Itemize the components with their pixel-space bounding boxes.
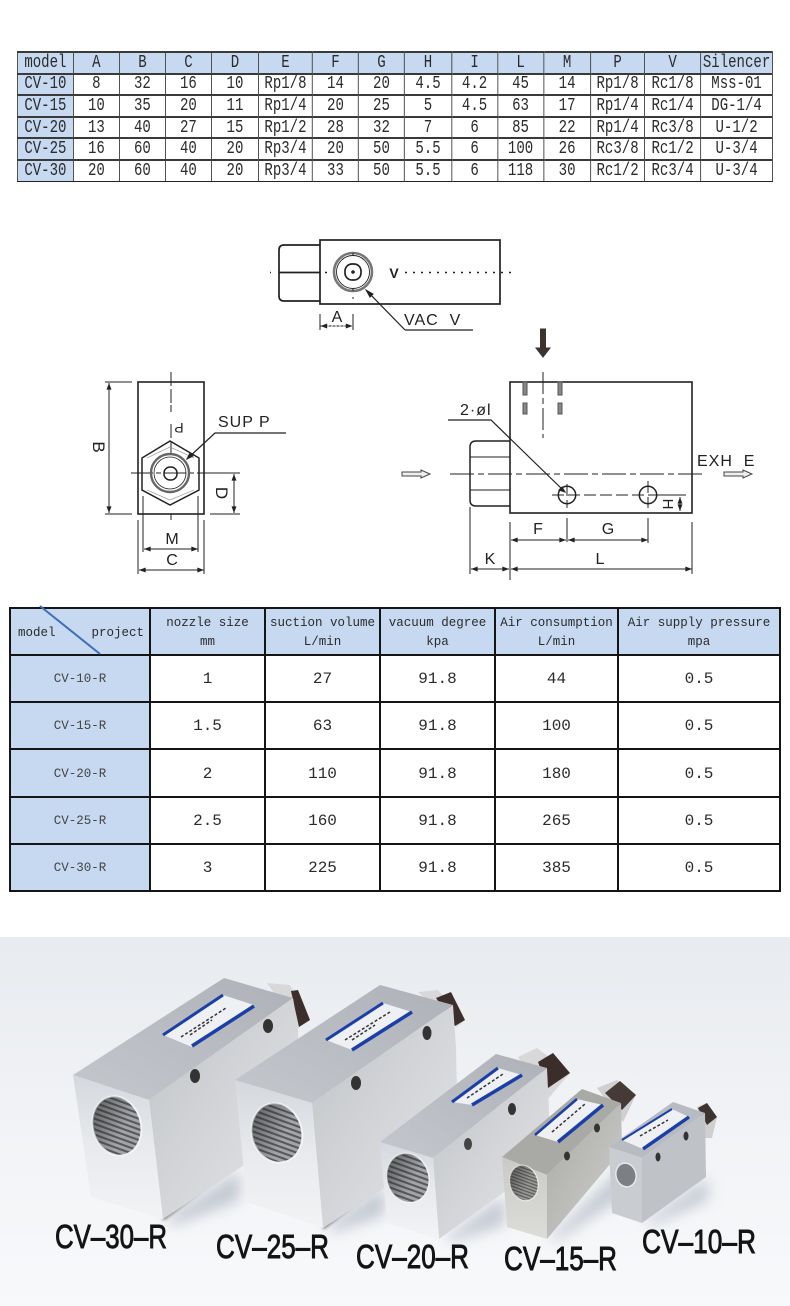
row: CV-20-R: 110 (308, 765, 337, 783)
dimension C (138, 520, 204, 574)
performance table header row: vacuum degree (389, 616, 486, 630)
row: CV-30-R: CV-30-R (54, 861, 106, 875)
row: CV-15: Rp1/4 (597, 96, 639, 116)
rotated P mark: P (174, 420, 184, 436)
row: CV-10: 8 (92, 74, 101, 94)
dimension table header row: A (92, 53, 101, 73)
row: CV-25: 20 (327, 139, 344, 159)
dimension K (470, 507, 509, 574)
performance table header row: L/min (538, 635, 575, 649)
performance table header row: mpa (688, 635, 710, 649)
table: dimensions by model (17, 51, 773, 182)
product: CV-15-R (502, 1080, 636, 1239)
row: CV-25: 26 (559, 139, 576, 159)
row: CV-15: CV-15 (24, 96, 66, 116)
floor shadows (165, 1165, 708, 1242)
row: CV-30-R: 225 (308, 859, 337, 877)
row: CV-25: Rc1/2 (651, 139, 694, 159)
row: CV-10: Rp1/8 (597, 74, 639, 94)
row: CV-25: 5.5 (415, 139, 441, 159)
row: CV-15: 5 (424, 96, 432, 116)
row: CV-10-R: 27 (313, 670, 332, 688)
row: CV-20: 6 (470, 118, 479, 138)
dimension H: H (659, 499, 676, 509)
row: CV-15: 4.5 (462, 96, 487, 116)
performance table header row (11, 609, 779, 654)
dimension table header row: V (668, 53, 677, 73)
row: CV-15: 17 (559, 96, 576, 116)
technical drawings (89, 239, 755, 580)
row: CV-10 (18, 74, 762, 94)
row: CV-20 (18, 118, 758, 138)
product photo illustration (0, 937, 790, 1278)
row: CV-30: 6 (470, 161, 479, 181)
performance table header row: project (91, 626, 144, 640)
dimension table header row: H (424, 53, 432, 73)
table: performance by model (9, 607, 781, 892)
row: CV-25: 50 (373, 139, 390, 159)
row: CV-20-R: CV-20-R (54, 767, 106, 781)
row: CV-30: 30 (559, 161, 576, 181)
dimension G: G (602, 521, 614, 538)
dimension D: D (212, 487, 231, 499)
performance table header row: model (18, 626, 56, 640)
row: CV-20: 32 (373, 118, 390, 138)
row: CV-20: 7 (424, 118, 432, 138)
arrow: inlet right (402, 470, 430, 478)
row: CV-30-R: 385 (542, 859, 571, 877)
row: CV-30-R: 3 (203, 859, 212, 877)
dimension L: L (596, 551, 605, 568)
row: CV-20-R: 180 (542, 765, 571, 783)
arrow: supply down (536, 329, 550, 357)
row: CV-10: 10 (227, 74, 243, 94)
label: EXH E: EXH E (697, 453, 755, 470)
row: CV-25: U-3/4 (715, 139, 758, 159)
row: CV-15: 63 (512, 96, 529, 116)
row: CV-25-R: 91.8 (418, 812, 457, 830)
row: CV-20-R: 0.5 (685, 765, 713, 783)
row: CV-20: 28 (327, 118, 344, 138)
product: CV-25-R (235, 985, 465, 1228)
product: CV-20-R (380, 1048, 570, 1239)
row: CV-10: Rp1/8 (264, 74, 307, 94)
row: CV-30-R: 91.8 (418, 859, 457, 877)
dimension A (320, 309, 353, 330)
row: CV-20: 22 (559, 118, 576, 138)
row: CV-15: 20 (327, 96, 344, 116)
row: CV-10-R: CV-10-R (54, 672, 106, 686)
row: CV-20: 13 (88, 118, 105, 138)
row: CV-10-R: 1 (203, 670, 212, 688)
row: CV-10: Rc1/8 (651, 74, 694, 94)
callout: VAC V: VAC V (404, 312, 461, 329)
dimension H (658, 495, 686, 511)
dimension table header row: I (470, 53, 479, 73)
row: CV-20-R (11, 750, 713, 796)
row: CV-30: 60 (134, 161, 151, 181)
row: CV-20: CV-20 (24, 118, 66, 138)
label: CV-15-R: CV–15–R (504, 1240, 617, 1277)
row: CV-20: U-1/2 (715, 118, 758, 138)
row: CV-25: 40 (180, 139, 197, 159)
performance table header row: mm (200, 635, 215, 649)
drawing: top view with VAC V port (270, 240, 512, 330)
row: CV-25: 100 (508, 139, 533, 159)
row: CV-15-R: 100 (542, 717, 571, 735)
row: CV-15: DG-1/4 (711, 96, 762, 116)
row: CV-20: Rp1/4 (597, 118, 639, 138)
row: CV-25-R (11, 798, 713, 843)
label: CV-30-R: CV–30–R (55, 1218, 167, 1255)
row: CV-25: 20 (227, 139, 243, 159)
dimension table header row: B (138, 53, 147, 73)
callout: SUP P: SUP P (218, 414, 271, 431)
row: CV-25: 16 (88, 139, 105, 159)
row: CV-20: Rp1/2 (264, 118, 307, 138)
dimension B: B (89, 441, 108, 453)
header diagonal line (39, 605, 101, 655)
row: CV-10: 4.2 (462, 74, 487, 94)
row: CV-15: Rp1/4 (264, 96, 307, 116)
performance table header row: suction volume (270, 616, 375, 630)
row: CV-10-R: 44 (547, 670, 566, 688)
dimension K: K (485, 551, 496, 568)
row: CV-15: 10 (88, 96, 105, 116)
row: CV-20: 15 (227, 118, 243, 138)
row: CV-15-R: 63 (313, 717, 332, 735)
row: CV-30: Rc3/4 (651, 161, 694, 181)
row: CV-10: 16 (180, 74, 197, 94)
row: CV-30-R (11, 845, 713, 890)
dimension table header row: L (516, 53, 525, 73)
row: CV-30: Rc1/2 (597, 161, 639, 181)
row: CV-30: 33 (327, 161, 344, 181)
callout: 2-hole diameter (448, 402, 565, 492)
row: CV-20: 85 (512, 118, 529, 138)
performance table header row: Air supply pressure (628, 616, 770, 630)
dimension table header row: G (377, 53, 386, 73)
callout: SUP P (187, 414, 286, 459)
row: CV-10: 45 (512, 74, 529, 94)
dimension table header row: model (24, 53, 66, 73)
row: CV-15-R: CV-15-R (54, 719, 106, 733)
row: CV-30: Rp3/4 (264, 161, 307, 181)
callout: VAC V (366, 290, 473, 330)
row: CV-30: 50 (373, 161, 390, 181)
row: CV-10: CV-10 (24, 74, 66, 94)
dimension D (210, 473, 240, 514)
row: CV-15: Rc1/4 (651, 96, 694, 116)
row: CV-10: Mss-01 (711, 74, 762, 94)
dimension table header row: F (331, 53, 340, 73)
arrow: exhaust right (724, 470, 752, 478)
row: CV-10-R (11, 656, 713, 701)
row: CV-30: U-3/4 (715, 161, 758, 181)
callout: 2-hole diameter: 2·øl (460, 402, 492, 419)
row: CV-15-R: 0.5 (685, 717, 713, 735)
row: CV-30: 40 (180, 161, 197, 181)
row: CV-15: 20 (180, 96, 197, 116)
dimension M: M (165, 531, 179, 548)
row: CV-25-R: 160 (308, 812, 337, 830)
product: CV-30-R (73, 978, 310, 1219)
row: CV-10: 32 (134, 74, 151, 94)
dimension F (510, 518, 567, 580)
row: CV-15 (18, 96, 762, 116)
row: CV-30: 20 (88, 161, 105, 181)
row: CV-20-R: 2 (203, 765, 212, 783)
row: CV-10: 14 (327, 74, 344, 94)
row: CV-10: 20 (373, 74, 390, 94)
row: CV-20: Rc3/8 (651, 118, 694, 138)
dimension table header row: C (184, 53, 193, 73)
dimension B (89, 382, 132, 514)
product labels (55, 1218, 756, 1277)
row: CV-25-R: CV-25-R (54, 814, 106, 828)
label: CV-10-R: CV–10–R (642, 1223, 756, 1260)
row: CV-10: 14 (559, 74, 576, 94)
row: CV-10-R: 91.8 (418, 670, 457, 688)
row: CV-10: 4.5 (415, 74, 441, 94)
drawing: end view with SUP P port (89, 372, 286, 574)
label: CV-25-R: CV–25–R (216, 1228, 329, 1265)
row: CV-15-R: 1.5 (193, 717, 222, 735)
row: CV-15-R (11, 703, 713, 748)
dimension A: A (332, 309, 343, 326)
performance table header row: nozzle size (166, 616, 249, 630)
row: CV-30: 5.5 (415, 161, 441, 181)
row: CV-25-R: 265 (542, 812, 571, 830)
dimension table header row: Silencer (703, 53, 770, 73)
row: CV-25: 6 (470, 139, 479, 159)
dimension F: F (533, 521, 543, 538)
V mark: V (389, 265, 399, 281)
performance table header row: Air consumption (500, 616, 613, 630)
row: CV-15: 11 (227, 96, 243, 116)
row: CV-30: CV-30 (24, 161, 66, 181)
row: CV-10-R: 0.5 (685, 670, 713, 688)
performance table header row: kpa (426, 635, 449, 649)
dimension table header row: D (231, 53, 239, 73)
row: CV-25-R: 0.5 (685, 812, 713, 830)
row: CV-15: 25 (373, 96, 390, 116)
row: CV-15: 35 (134, 96, 151, 116)
row: CV-25 (18, 139, 758, 159)
row: CV-20-R: 91.8 (418, 765, 457, 783)
row: CV-25: CV-25 (24, 139, 66, 159)
drawing: side view with EXH E port (402, 329, 755, 580)
row: CV-15-R: 91.8 (418, 717, 457, 735)
dimension M (143, 496, 198, 552)
row: CV-25: 60 (134, 139, 151, 159)
performance table header row: L/min (304, 635, 341, 649)
dimension G (568, 518, 648, 543)
row: CV-20: 27 (180, 118, 197, 138)
dimension table header row: P (613, 53, 622, 73)
row: CV-25: Rp3/4 (264, 139, 307, 159)
dimension table header row: E (281, 53, 290, 73)
dimension table header row: M (563, 53, 571, 73)
label: CV-20-R: CV–20–R (356, 1238, 469, 1275)
dimension C: C (166, 552, 178, 569)
row: CV-30: 118 (508, 161, 533, 181)
row: CV-20: 40 (134, 118, 151, 138)
row: CV-25: Rc3/8 (597, 139, 639, 159)
product: CV-10-R (609, 1102, 717, 1223)
dimension table header row (18, 53, 772, 73)
row: CV-30 (18, 161, 758, 181)
row: CV-25-R: 2.5 (193, 812, 222, 830)
row: CV-30-R: 0.5 (685, 859, 713, 877)
photo background (0, 937, 790, 1306)
row: CV-30: 20 (227, 161, 243, 181)
